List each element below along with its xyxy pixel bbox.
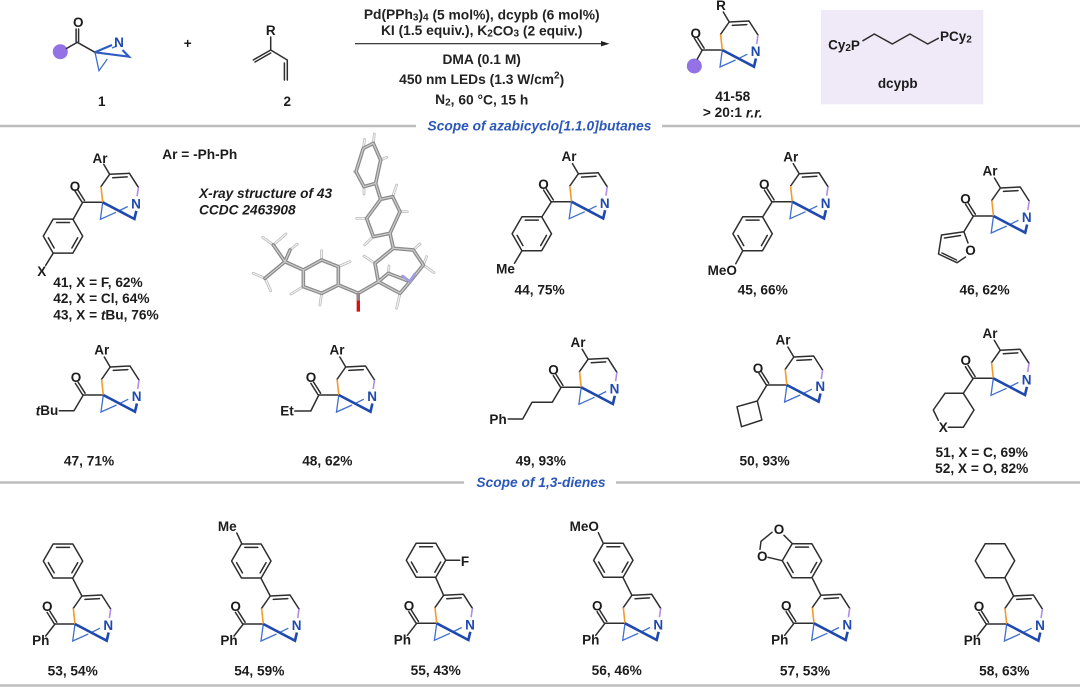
panel: dcypb ligand: P (851, 38, 860, 52)
reaction conditions and arrow: ) (418, 7, 423, 22)
compound 54: O (230, 599, 241, 614)
compound 46: Ar (982, 164, 998, 178)
compound 47: Ar (94, 342, 110, 358)
compound 58: 58, 63% (979, 664, 1029, 678)
compound 54: 54, 59% (234, 664, 284, 678)
reaction conditions and arrow: (2 equiv.) (519, 23, 582, 38)
compound 48: Ar (329, 342, 345, 358)
compound 44: O (538, 177, 549, 192)
compounds 41-43: N (131, 197, 141, 212)
panel: dcypb ligand: dcypb (878, 76, 918, 91)
compound 49: 49, 93% (516, 453, 566, 468)
X-ray caption: CCDC 2463908 (199, 202, 296, 218)
compound 55: Ph (394, 632, 411, 647)
compound 56: 56, 46% (592, 663, 642, 678)
reaction conditions and arrow: 2 (487, 28, 493, 39)
compound number 2: 2 (284, 94, 291, 109)
reaction conditions and arrow: 2 (554, 70, 560, 81)
reaction conditions and arrow: Pd(PPh (364, 7, 413, 22)
compound 56: MeO (570, 519, 599, 534)
compound 45: O (759, 177, 770, 192)
compound 58: N (1035, 618, 1045, 633)
compound 50: 50, 93% (739, 454, 790, 468)
compound 44: N (600, 196, 610, 211)
compound 45 (708, 150, 830, 298)
compounds 51-52: 51, X = C, 69% (935, 445, 1028, 460)
compound 49: Ar (570, 335, 586, 350)
compounds 51-52 (933, 326, 1031, 476)
compound 58: Ph (964, 633, 981, 648)
compound 49 (489, 335, 619, 468)
compound 47: 47, 71% (64, 454, 114, 468)
reaction conditions and arrow: ) (560, 72, 564, 87)
panel: dcypb ligand: 2 (966, 34, 972, 45)
compound 55: N (465, 617, 475, 632)
compound 45: Ar (783, 150, 799, 165)
compound 58: O (974, 599, 984, 614)
compound 58 (964, 544, 1045, 678)
compound 47: tBu (36, 403, 58, 418)
compound 50: Ar (775, 332, 791, 348)
reactant 1: azabicyclobutane (53, 15, 129, 71)
compound 46: O (965, 243, 976, 258)
compounds 41-43: O (70, 179, 80, 194)
reaction conditions and arrow: , 60 °C, 15 h (451, 92, 528, 107)
compound 57: 57, 53% (780, 663, 830, 678)
compound 46: O (960, 192, 971, 206)
compound 50: O (753, 361, 763, 376)
reaction conditions and arrow: CO (493, 23, 514, 38)
compound 53: 53, 54% (48, 664, 98, 678)
compounds 41-43: 42, X = Cl, 64% (53, 291, 150, 306)
heading: scope of 1,3-dienes: Scope of 1,3-dienes (476, 475, 606, 490)
compound 54: Me (218, 519, 237, 534)
compound 53: N (103, 618, 113, 633)
compound 48: 48, 62% (302, 454, 352, 468)
compound 47: N (132, 389, 141, 404)
plus sign: + (184, 36, 192, 51)
panel: dcypb ligand: PCy (940, 29, 966, 44)
compound 47 (36, 342, 141, 468)
compound 46 (938, 164, 1032, 298)
heading: scope of azabicyclo[1.1.0]butanes: Scope of azabicyclo[1.1.0]butanes (428, 118, 652, 134)
compound 48: Et (280, 404, 294, 418)
compound 50: N (815, 379, 825, 394)
compounds 41-43: 41, X = F, 62% (53, 275, 143, 290)
compounds 41-43 (37, 151, 159, 322)
product 41-58 (687, 0, 763, 120)
compounds 51-52: X (939, 420, 948, 435)
X-ray crystal structure of 43 (253, 134, 434, 312)
compounds 51-52: 52, X = O, 82% (935, 461, 1028, 476)
product 41-58: N (751, 44, 760, 59)
compound 57 (757, 522, 852, 678)
X-ray caption: X-ray structure of 43 (198, 186, 333, 201)
reaction conditions and arrow: KI (1.5 equiv.), K (381, 23, 487, 38)
panel: dcypb ligand: Cy (828, 38, 845, 52)
compound 45: MeO (708, 263, 737, 278)
reaction conditions and arrow (355, 7, 610, 108)
compound 55: F (461, 554, 469, 569)
compound 50 (737, 332, 825, 468)
reactant 1: azabicyclobutane: O (73, 15, 84, 30)
reaction conditions and arrow: N (435, 92, 445, 107)
reaction conditions and arrow: 3 (514, 28, 520, 39)
panel: dcypb ligand: 2 (845, 42, 851, 54)
compound 55 (394, 543, 475, 678)
compound 49: O (548, 362, 559, 377)
compound 57: N (842, 617, 852, 632)
compound 44: Me (496, 262, 515, 277)
compound 48 (280, 342, 377, 468)
compound 57: O (757, 549, 768, 564)
reaction conditions and arrow: (5 mol%), dcypb (6 mol%) (429, 7, 600, 22)
compound number 1: 1 (98, 94, 106, 109)
compound 56 (570, 519, 663, 678)
compound 49: Ph (489, 412, 507, 427)
reactant 2: diene: R (266, 23, 276, 38)
reactant 1: azabicyclobutane: N (114, 35, 124, 50)
compound 44: 44, 75% (514, 282, 565, 298)
compound 57: O (774, 522, 784, 537)
compound 44: Ar (561, 149, 577, 164)
compound 48: N (367, 389, 377, 404)
reaction conditions and arrow: 3 (413, 12, 419, 23)
reaction conditions and arrow: DMA (0.1 M) (442, 52, 521, 67)
compound 56: N (653, 617, 663, 632)
compounds 41-43: X (37, 264, 46, 279)
compound 54 (218, 519, 301, 678)
compounds 41-43: 43, X = tBu, 76% (53, 308, 159, 322)
compound 49: N (610, 381, 619, 396)
X-ray caption (198, 186, 333, 218)
compound 45: N (821, 196, 830, 211)
compound 57: O (781, 598, 792, 613)
product 41-58: O (690, 26, 701, 41)
compound 56: O (592, 598, 603, 613)
compound 46: N (1022, 210, 1032, 225)
compound 45: 45, 66% (738, 282, 788, 298)
reaction conditions and arrow: 4 (423, 12, 429, 23)
compound 47: O (71, 370, 81, 385)
compounds 41-43: Ar (92, 151, 108, 166)
reaction conditions and arrow: 450 nm LEDs (1.3 W/cm (399, 72, 554, 87)
compound 55: 55, 43% (411, 663, 461, 678)
compound 57: Ph (771, 632, 788, 647)
compound 55: O (404, 598, 414, 613)
compound 54: N (292, 618, 301, 633)
panel: dcypb ligand (821, 10, 983, 104)
compounds 51-52: Ar (982, 326, 998, 341)
product 41-58: 41-58 (715, 89, 751, 104)
compound 48: O (306, 370, 316, 385)
compound 53 (32, 544, 113, 678)
compound 54: Ph (220, 633, 238, 648)
compound 53: O (42, 599, 53, 614)
compound 53: Ph (32, 633, 49, 648)
compound 44 (496, 149, 610, 298)
reaction conditions and arrow: 2 (445, 97, 451, 108)
compounds 51-52: O (960, 353, 971, 368)
reactant 2: diene (253, 23, 287, 80)
compounds 51-52: N (1022, 372, 1031, 387)
Ar definition: Ar = -Ph-Ph (162, 147, 237, 162)
compound 56: Ph (582, 632, 599, 647)
product 41-58: > 20:1 r.r. (703, 105, 763, 120)
compound 46: 46, 62% (959, 282, 1010, 298)
